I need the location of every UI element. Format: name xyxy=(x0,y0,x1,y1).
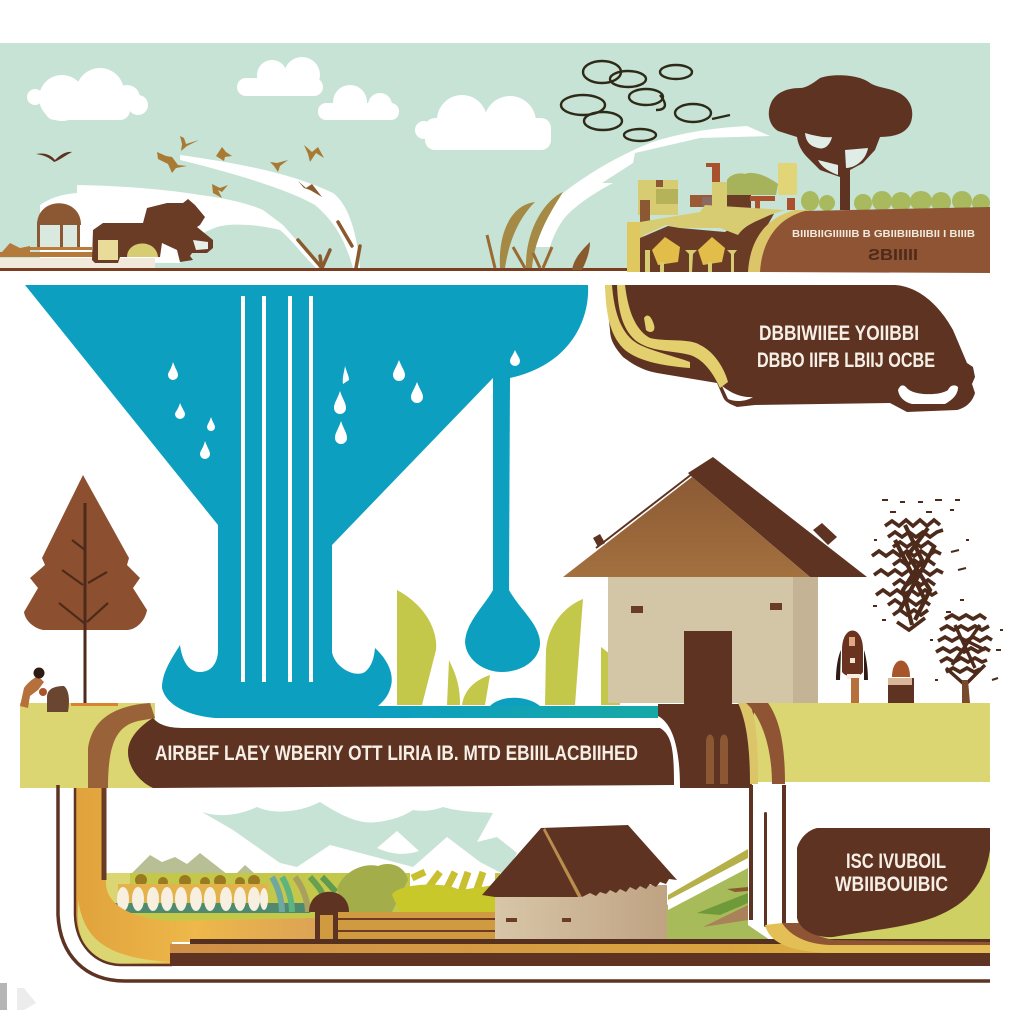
banner text: AIRBEF LAEY WBERIY OTT LIRIA IB. MTD EBIIILACBIIHED xyxy=(155,742,638,765)
person seated xyxy=(888,660,914,703)
left ground xyxy=(20,668,155,788)
right hillside xyxy=(667,860,770,940)
orange pipe xyxy=(74,788,315,964)
text banner xyxy=(128,718,674,788)
soil block number: ƧBIIIII xyxy=(868,247,918,264)
tree: large dotted xyxy=(872,500,969,630)
top-right callout xyxy=(605,285,975,412)
birds and leaves xyxy=(36,136,360,268)
panel: sky landscape xyxy=(0,43,990,273)
bottom-right callout: WBIIBOUIBIC xyxy=(835,873,948,896)
soil block xyxy=(748,207,990,273)
round bushes xyxy=(337,864,408,912)
gardener xyxy=(20,668,69,712)
thatched house xyxy=(482,825,677,939)
tree: conifer xyxy=(24,475,147,703)
white wind streams xyxy=(40,126,770,268)
dotted trees xyxy=(872,500,1003,703)
bushes xyxy=(801,191,990,212)
people xyxy=(836,630,914,703)
waterfall lines xyxy=(241,296,313,682)
small hut xyxy=(0,203,155,269)
hills xyxy=(130,853,262,880)
water funnel xyxy=(25,285,658,718)
striped furrows xyxy=(272,877,336,912)
yellow stripes xyxy=(410,872,495,900)
clouds xyxy=(27,57,551,150)
person standing xyxy=(836,630,868,703)
callout text: DBBIWIIEE YOIIBBI xyxy=(759,322,919,345)
bottom scene xyxy=(58,785,990,981)
outer pipe line xyxy=(58,785,990,981)
tree: small dotted xyxy=(930,615,1003,703)
watermark mark xyxy=(0,983,36,1010)
soil block caption: BIIIBIIGIIIIIIB B GBIIBIIBIIBII I BIIIB xyxy=(792,229,975,240)
water droplets xyxy=(168,350,520,459)
fields xyxy=(106,873,500,925)
drain pipe xyxy=(658,703,785,788)
vertical pipes xyxy=(749,785,786,927)
right ground xyxy=(745,703,990,782)
house xyxy=(563,457,867,704)
planks xyxy=(338,912,498,940)
distant mountains xyxy=(202,802,517,875)
animal xyxy=(92,199,213,263)
top-right callout: DBBO IIFB LBIIJ OCBE xyxy=(757,349,935,372)
ground line xyxy=(0,268,640,271)
tree large xyxy=(769,75,912,210)
mushroom hut xyxy=(309,892,349,942)
town blocks xyxy=(627,163,797,272)
reeds xyxy=(487,192,590,270)
bottom-right callout xyxy=(797,828,990,937)
thought bubbles xyxy=(561,61,730,141)
plants xyxy=(397,590,622,706)
callout text: ISC IVUBOIL xyxy=(846,850,946,873)
foundation layers xyxy=(170,923,990,966)
corn rows xyxy=(117,874,268,911)
